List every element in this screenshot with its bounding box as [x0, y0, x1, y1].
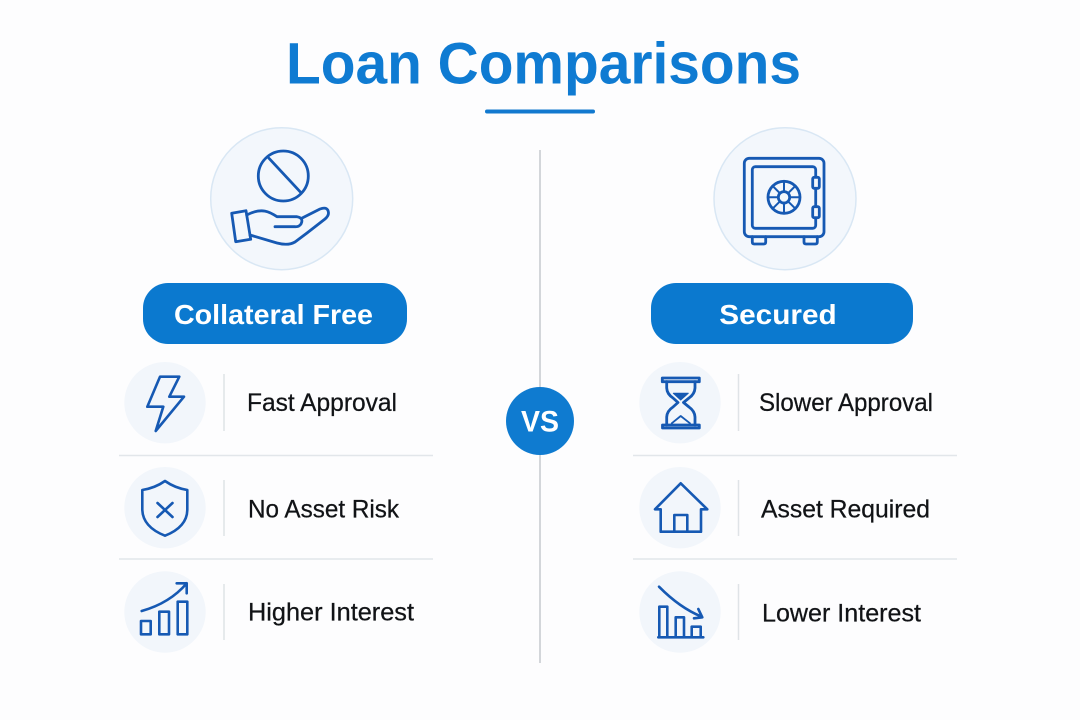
center divider line	[539, 150, 541, 663]
row: asset required	[639, 467, 930, 548]
vs badge: VS	[521, 406, 559, 438]
row: higher interest: Higher Interest	[248, 598, 414, 626]
row: fast approval: Fast Approval	[247, 389, 397, 417]
row: fast approval	[124, 362, 397, 443]
title: Loan Comparisons	[286, 32, 801, 96]
heading: secured: Secured	[719, 299, 837, 330]
panel: secured	[633, 128, 957, 653]
row: asset required: Asset Required	[761, 496, 930, 524]
row: slower approval: Slower Approval	[759, 389, 933, 417]
vs badge	[506, 387, 574, 455]
row: no asset risk: No Asset Risk	[248, 496, 399, 524]
heading: collateral free	[143, 283, 407, 344]
row: lower interest: Lower Interest	[762, 600, 921, 628]
heading: secured	[651, 283, 913, 344]
panel: collateral free	[119, 128, 433, 653]
row: higher interest	[124, 571, 414, 653]
row: slower approval	[639, 362, 933, 443]
heading: collateral free: Collateral Free	[174, 299, 373, 330]
row: no asset risk	[124, 467, 399, 548]
row: lower interest	[639, 571, 921, 653]
icon: hand with prohibited sign	[211, 128, 353, 270]
icon: safe	[714, 128, 856, 270]
